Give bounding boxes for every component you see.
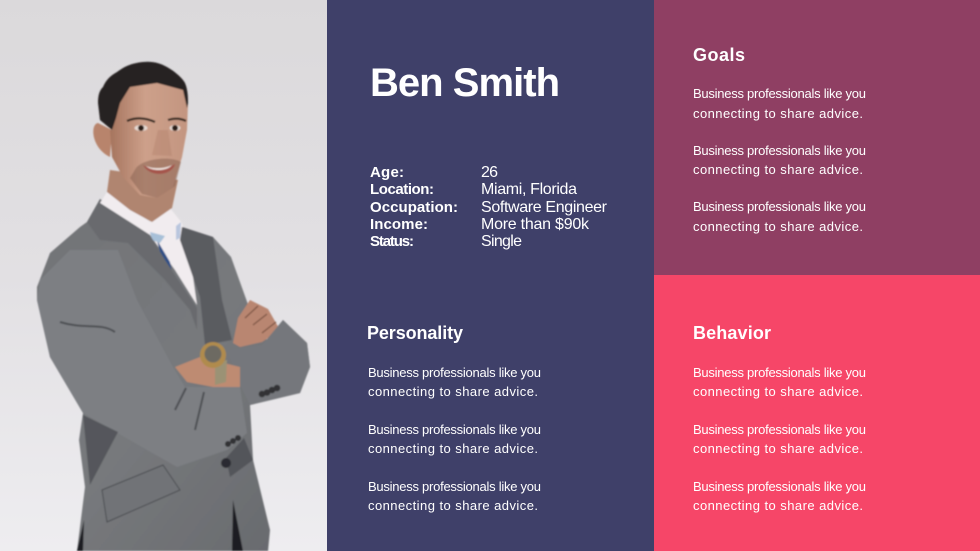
smile xyxy=(143,164,175,174)
behavior text: Business professionals like you xyxy=(693,422,866,437)
face xyxy=(110,80,188,198)
panel: goals xyxy=(654,0,980,275)
profile values: Single xyxy=(481,233,522,250)
profile labels: Income: xyxy=(370,216,428,233)
nose and beard shadow xyxy=(152,130,172,156)
panel: profile xyxy=(327,0,654,551)
crossed arm xyxy=(37,250,247,467)
behavior text xyxy=(693,365,866,513)
behavior text: connecting to share advice. xyxy=(693,498,863,513)
left lapel xyxy=(87,199,197,330)
profile values: 26 xyxy=(481,164,498,181)
goals text: connecting to share advice. xyxy=(693,219,863,234)
pocket xyxy=(102,465,180,522)
goals text: Business professionals like you xyxy=(693,86,866,101)
goals text: Business professionals like you xyxy=(693,143,866,158)
goals text: connecting to share advice. xyxy=(693,106,863,121)
goals text xyxy=(693,86,866,234)
goals text: connecting to share advice. xyxy=(693,162,863,177)
profile values xyxy=(481,164,608,250)
personality text: connecting to share advice. xyxy=(368,498,538,513)
right lapel xyxy=(180,227,232,345)
personality text: Business professionals like you xyxy=(368,365,541,380)
goals text: Business professionals like you xyxy=(693,199,866,214)
neck xyxy=(107,170,178,222)
personality text: Business professionals like you xyxy=(368,479,541,494)
profile labels: Location: xyxy=(370,181,434,198)
hand xyxy=(233,300,280,347)
title: Ben Smith xyxy=(370,61,560,105)
personality text: Business professionals like you xyxy=(368,422,541,437)
panel: photo xyxy=(0,0,327,551)
shirt xyxy=(100,192,197,305)
heading: goals: Goals xyxy=(693,45,745,65)
panel: behavior xyxy=(654,275,980,551)
profile values: More than $90k xyxy=(481,216,590,233)
brows and eyes xyxy=(127,118,186,122)
personality text: connecting to share advice. xyxy=(368,384,538,399)
hair xyxy=(98,62,188,130)
profile values: Miami, Florida xyxy=(481,181,577,198)
wrist and watch xyxy=(175,357,240,387)
cuff buttons xyxy=(259,385,280,397)
personality text: connecting to share advice. xyxy=(368,441,538,456)
heading: personality: Personality xyxy=(367,323,463,343)
profile labels: Age: xyxy=(370,164,404,181)
profile values: Software Engineer xyxy=(481,199,608,216)
jacket xyxy=(37,199,310,551)
behavior text: Business professionals like you xyxy=(693,479,866,494)
heading: behavior: Behavior xyxy=(693,323,771,343)
behavior text: Business professionals like you xyxy=(693,365,866,380)
profile labels xyxy=(370,164,458,250)
photo: man with crossed arms xyxy=(37,62,310,551)
profile labels: Occupation: xyxy=(370,199,458,216)
behavior text: connecting to share advice. xyxy=(693,441,863,456)
behavior text: connecting to share advice. xyxy=(693,384,863,399)
shadows and front button xyxy=(83,415,118,485)
personality text xyxy=(368,365,541,513)
ear xyxy=(93,123,112,157)
profile labels: Status: xyxy=(370,233,414,250)
forearm sleeve xyxy=(227,320,310,405)
